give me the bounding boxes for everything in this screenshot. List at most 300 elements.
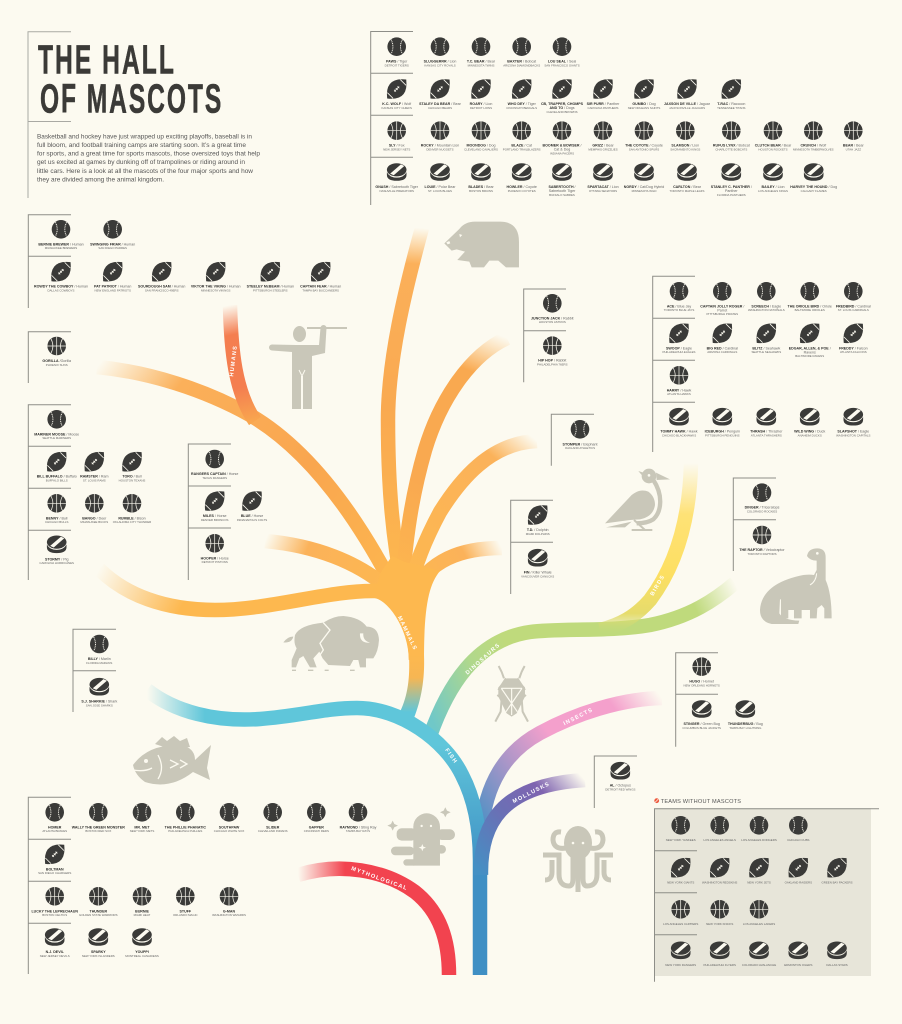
mascot: Roary: DETROIT LIONS: [470, 106, 492, 110]
mascot: Slapshot: SLAPSHOT / Eagle: [837, 430, 869, 434]
mascot: Nordy: MINNESOTA WILD: [632, 189, 656, 193]
mascot: K.C. Wolf: [381, 73, 412, 110]
mascot: Boomer and Bowser: BOOMER & BOWSER /: [543, 144, 581, 148]
mascot: Thunderbug: THUNDERBUG / Bug: [728, 722, 763, 726]
mascot: Jaxson De Ville: [664, 73, 711, 110]
mascot: Screech: SCREECH / Eagle: [751, 304, 781, 308]
team: Los Angeles Clippers: LOS ANGELES CLIPPERS: [663, 922, 698, 926]
mascot: Pat Patriot: PAT PATRIOT / Human: [94, 285, 131, 289]
mascot: Rangers Captain: [191, 450, 238, 480]
mascot: Blitz: BLITZ / Seahawk: [752, 346, 780, 350]
mascot: Sparky: NEW YORK ISLANDERS: [82, 954, 115, 958]
mascot: Wild Wing: WILD WING / Duck: [794, 430, 825, 434]
mascot: Sir Purr: SIR PURR / Panther: [587, 102, 620, 106]
mascot: Nordy: NORDY / Cat/Dog Hybrid: [624, 185, 664, 189]
mascot: S.J. Sharkie: S.J. SHARKIE / Shark: [81, 700, 117, 704]
mascot: Blue: BLUE / Horse: [241, 514, 263, 518]
mascot: Thrash: THRASH / Thrasher: [750, 430, 783, 434]
heading: THE HALL: [38, 37, 176, 83]
mascot: Howler: [507, 163, 537, 193]
mascot: Swoop: SWOOP / Eagle: [666, 346, 692, 350]
mascot: Bailey: LOS ANGELES KINGS: [758, 189, 788, 193]
mascot: Screech: WASHINGTON NATIONALS: [748, 308, 785, 312]
mascot: Ace: [664, 282, 694, 312]
team: Edmonton Oilers: [784, 942, 812, 967]
panel: teams without mascots: [654, 798, 879, 982]
mascot: Gapper: CINCINNATI REDS: [304, 829, 329, 833]
mascot: Rowdy the Cowboy: [34, 256, 88, 292]
mascot: Boomer and Bowser: Cat & Dog: [554, 148, 570, 152]
team: New York Knicks: [706, 900, 733, 926]
label: mythological: MYTHOLOGICAL: [350, 866, 408, 892]
team: New York Jets: [743, 852, 775, 884]
mascot: Stanley C. Panther: Panther: [725, 189, 738, 193]
icon: beetle: [495, 666, 528, 722]
mascot: Who Dey: CINCINNATI BENGALS: [506, 106, 537, 110]
intro text: they are divided among the animal kingdom.: [37, 176, 164, 183]
mascot: Louie: LOUIE / Polar Bear: [425, 185, 456, 189]
mascot: Tommy Hawk: TOMMY HAWK / Hawk: [660, 430, 698, 434]
mascot: Big Red: [707, 318, 738, 354]
team: Dallas Stars: [826, 942, 848, 967]
mascot: Burnie: MIAMI HEAT: [134, 913, 151, 917]
mascot: Toro: HOUSTON TEXANS: [119, 479, 145, 483]
mascot: Youppi: YOUPPI: [135, 950, 149, 954]
mascot: T.C. Bear: [467, 37, 496, 68]
mascot: Slider: [258, 803, 288, 833]
mascot: Edgar, Allen, and Poe: EDGAR, ALLEN, & POE /: [789, 346, 831, 350]
mascot: Staley Da Bear: CHICAGO BEARS: [428, 106, 452, 110]
mascot: Slider: SLIDER: [266, 825, 280, 829]
mascot: Sabertooth: BUFFALO SABRES: [549, 193, 575, 197]
family tree ribbons: [97, 228, 735, 975]
mascot: T.C. Bear: T.C. BEAR / Bear: [467, 60, 496, 64]
mascot: Captain Fear: TAMPA BAY BUCCANEERS: [302, 289, 339, 293]
panel: birds: [653, 276, 871, 452]
mascot: Bango: BANGO / Deer: [82, 516, 107, 520]
panel: humans: [28, 215, 341, 308]
mascot: Carlton: [670, 163, 705, 193]
team: New York Yankees: NEW YORK YANKEES: [666, 838, 696, 842]
team: Colorado Avalanche: [742, 942, 776, 967]
mascot: Tommy Hawk: CHICAGO BLACKHAWKS: [662, 434, 696, 438]
mascot: Hooper: HOOPER / Horse: [201, 556, 229, 560]
mascot: Wild Wing: [794, 408, 825, 438]
mascot: Rufus Lynx: [713, 121, 750, 152]
label: dinosaurs: DINOSAURS: [465, 642, 502, 676]
mascot: Stormy: [39, 536, 74, 565]
mascot: Rowdy the Cowboy: DALLAS COWBOYS: [48, 289, 75, 293]
mascot: Rocky: ROCKY / Mountain Lion: [421, 144, 459, 148]
mascot: Swoop: [663, 318, 696, 354]
mascot: Stinger: STINGER / Green Bug: [684, 722, 720, 726]
team: Dallas Stars: DALLAS STARS: [826, 963, 848, 967]
mascot: Mariner Moose: SEATTLE MARINERS: [42, 436, 71, 440]
mascot: Rumble: [113, 494, 151, 524]
panel: rabbits: [524, 289, 574, 382]
mascot: Grizz: MEMPHIS GRIZZLIES: [588, 147, 618, 151]
mascot: The Phillie Phanatic: PHILADELPHIA PHILLIES: [168, 829, 202, 833]
mascot: Sluggerrr: KANSAS CITY ROYALS: [424, 64, 456, 68]
mascot: Hooper: DETROIT PISTONS: [202, 560, 228, 564]
mascot: CB, Trapper, Chomps and TD: [541, 73, 584, 114]
mascot: Burnie: [133, 887, 151, 917]
mascot: Junction Jack: JUNCTION JACK / Rabbit: [531, 316, 574, 320]
mascot: The Coyote: SAN ANTONIO SPURS: [629, 147, 659, 151]
mascot: Captain Jolly Roger: CAPTAIN JOLLY ROGER /: [700, 304, 744, 308]
intro text: Basketball and hockey have just wrapped up exciting playoffs, baseball is in: [37, 134, 252, 140]
team: New York Knicks: NEW YORK KNICKS: [706, 922, 733, 926]
mascot: Stomper: STOMPER / Elephant: [563, 442, 597, 446]
mascot: Sourdough Sam: SOURDOUGH SAM / Human: [138, 285, 185, 289]
team: Chicago Cubs: CHICAGO CUBS: [787, 838, 810, 842]
mascot: Bill Buffalo: [37, 446, 77, 482]
mascot: CB, Trapper, Chomps and TD: CLEVELAND BROWNS: [546, 110, 578, 114]
team: Los Angeles Clippers: [663, 900, 698, 926]
mascot: Gumbo: NEW ORLEANS SAINTS: [628, 106, 660, 110]
team: Chicago Cubs: [787, 816, 810, 842]
icon: no symbol: [654, 798, 659, 803]
mascot: The Oriole Bird: THE ORIOLE BIRD / Oriole: [788, 304, 832, 308]
mascot: Gnash: [375, 163, 419, 193]
mascot: Thunder: [79, 887, 118, 917]
mascot: Captain Fear: [300, 256, 341, 292]
team: Washington Redskins: [702, 852, 737, 884]
mascot: Sluggerrr: SLUGGERRR / Lion: [424, 60, 456, 64]
mascot: Al: DETROIT RED WINGS: [605, 788, 635, 792]
mascot: Baxter: [503, 37, 540, 68]
mascot: Blitz: SEATTLE SEAHAWKS: [751, 350, 781, 354]
mascot: Big Red: BIG RED / Cardinal: [707, 346, 738, 350]
mascot: Jaxson De Ville: JAXSON DE VILLE / Jaguar: [664, 102, 711, 106]
panel: horses: [188, 444, 268, 580]
mascot: Billy: [86, 635, 112, 665]
icon: dinosaur: [760, 548, 832, 624]
team: Green Bay Packers: GREEN BAY PACKERS: [821, 881, 853, 885]
mascot: Benny: [45, 494, 68, 524]
mascot: Steeley McBeam: STEELEY McBEAM / Human: [247, 285, 294, 289]
mascot: Southpaw: SOUTHPAW: [219, 825, 240, 829]
mascot: T-Rac: T-RAC / Raccoon: [717, 102, 745, 106]
panel: gorilla: [28, 332, 71, 383]
icon: mythological creature: [387, 807, 455, 866]
mascot: Mariner Moose: [34, 410, 79, 440]
mascot: N.J. Devil: [40, 928, 70, 958]
mascot: Stuff: STUFF: [180, 909, 192, 913]
mascot: Harvey the Hound: [790, 163, 837, 193]
mascot: Sabertooth: SABERTOOTH /: [548, 185, 576, 189]
mascot: Burnie: BURNIE: [135, 909, 149, 913]
mascot: Bear: UTAH JAZZ: [846, 147, 861, 151]
mascot: Who Dey: WHO DEY / Tiger: [508, 102, 537, 106]
mascot: Ace: TORONTO BLUE JAYS: [664, 308, 694, 312]
mascot: Rufus Lynx: CHARLOTTE BOBCATS: [715, 147, 747, 151]
mascot: Billy: BILLY / Marlin: [88, 657, 111, 661]
mascot: Stormy: STORMY / Pig: [45, 557, 68, 561]
panel: insects: [676, 653, 763, 747]
mascot: Harvey the Hound: CALGARY FLAMES: [801, 189, 827, 193]
mascot: T.C. Bear: MINNESOTA TWINS: [468, 64, 495, 68]
team: New York Giants: [665, 852, 696, 884]
mascot: Spartacat: SPARTACAT / Lion: [587, 185, 619, 189]
mascot: Jaxson De Ville: JACKSONVILLE JAGUARS: [669, 106, 705, 110]
mascot: Fin: FIN / Killer Whale: [524, 571, 552, 575]
mascot: Bill Buffalo: BUFFALO BILLS: [46, 479, 68, 483]
mascot: Raymond: RAYMOND / Sting Ray: [340, 825, 377, 829]
mascot: Hugo: NEW ORLEANS HORNETS: [684, 684, 720, 688]
mascot: Hugo: HUGO / Hornet: [689, 680, 714, 684]
mascot: G-Man: [212, 887, 246, 917]
mascot: Baxter: ARIZONA DIAMONDBACKS: [503, 64, 540, 68]
mascot: Benny: BENNY / Bull: [46, 516, 68, 520]
team: New York Yankees: [666, 816, 696, 842]
mascot: Steeley McBeam: PITTSBURGH STEELERS: [253, 289, 288, 293]
mascot: Stanley C. Panther: FLORIDA PANTHERS: [717, 193, 746, 197]
mascot: Lou Seal: SAN FRANCISCO GIANTS: [544, 64, 580, 68]
mascot: Gumbo: [628, 73, 660, 110]
team: Philadelphia Flyers: PHILADELPHIA FLYERS: [703, 963, 736, 967]
label: mollusks: MOLLUSKS: [512, 781, 551, 805]
mascot: Sir Purr: CAROLINA PANTHERS: [588, 106, 619, 110]
team: Washington Redskins: WASHINGTON REDSKINS: [702, 881, 737, 885]
heading: [38, 37, 223, 122]
mascot: Mr. Met: NEW YORK METS: [130, 829, 154, 833]
mascot: Boomer and Bowser: [543, 121, 581, 156]
team: Los Angeles Lakers: LOS ANGELES LAKERS: [743, 922, 775, 926]
mascot: Mr. Met: MR. MET: [134, 825, 150, 829]
mascot: Sparky: [82, 928, 115, 958]
mascot: Ramster: [79, 446, 110, 482]
panel: dinosaurs: [733, 478, 785, 571]
mascot: Iceburgh: PITTSBURGH PENGUINS: [705, 434, 740, 438]
mascot: Blue: [236, 485, 268, 522]
mascot: Sluggerrr: [424, 37, 456, 68]
panel: mammals left block: [28, 405, 151, 580]
mascot: Dinger: DINGER / Triceratops: [745, 506, 780, 510]
mascot: Rowdy the Cowboy: ROWDY THE COWBOY / Human: [34, 285, 88, 289]
mascot: T.D.: MIAMI DOLPHINS: [526, 532, 550, 536]
mascot: Blaze: [503, 121, 541, 152]
mascot: T-Rac: TENNESSEE TITANS: [717, 106, 746, 110]
team: New York Giants: NEW YORK GIANTS: [667, 881, 694, 885]
mascot: N.J. Devil: NEW JERSEY DEVILS: [40, 954, 70, 958]
mascot: Raymond: [340, 803, 377, 833]
mascot: Lou Seal: [544, 37, 580, 68]
mascot: Crunch: CRUNCH / Wolf: [800, 144, 826, 148]
mascot: Wally the Green Monster: WALLY THE GREEN MONSTER: [72, 825, 125, 829]
mascot: Boomer and Bowser: INDIANA PACERS: [550, 151, 574, 155]
mascot: Clutch Bear: [755, 121, 792, 152]
mascot: Grizz: GRIZZ / Bear: [592, 144, 614, 148]
icon: human with spear: [269, 325, 347, 409]
mascot: Bailey: BAILEY / Lion: [762, 185, 784, 189]
mascot: Captain Fear: CAPTAIN FEAR / Human: [300, 285, 341, 289]
mascot: The Phillie Phanatic: [165, 803, 206, 833]
mascot: Wally the Green Monster: [72, 803, 125, 833]
mascot: Lucky the Leprechaun: LUCKY THE LEPRECHAUN: [31, 909, 78, 913]
mascot: Carlton: CARLTON / Bear: [673, 185, 702, 189]
team: New York Jets: NEW YORK JETS: [747, 881, 771, 885]
mascot: Rangers Captain: RANGERS CAPTAIN / Horse: [191, 472, 238, 476]
mascot: The Oriole Bird: [788, 282, 832, 312]
mascot: Raymond: TAMPA BAY RAYS: [346, 829, 370, 833]
mascot: CB, Trapper, Chomps and TD: CB, TRAPPER, CHOMPS: [541, 102, 584, 106]
team: New York Rangers: [665, 942, 696, 967]
team: Los Angeles Angels: LOS ANGELES ANGELS: [703, 838, 736, 842]
mascot: Gumbo: GUMBO / Dog: [632, 102, 656, 106]
mascot: Benny: CHICAGO BULLS: [45, 520, 68, 524]
mascot: Stuff: ORLANDO MAGIC: [173, 913, 198, 917]
team: Los Angeles Dodgers: LOS ANGELES DODGERS: [741, 838, 777, 842]
mascot: Thunder: GOLDEN STATE WARRIORS: [79, 913, 118, 917]
mascot: Rocky: [421, 121, 459, 152]
mascot: Harry: HARRY / Hawk: [667, 388, 692, 392]
mascot: Clutch Bear: CLUTCH BEAR / Bear: [755, 144, 792, 148]
intro text: [37, 134, 260, 183]
mascot: Southpaw: [214, 803, 244, 833]
mascot: Ramster: ST. LOUIS RAMS: [83, 479, 106, 483]
panel: mammals top block: [371, 32, 864, 205]
mascot: Blaze: PORTLAND TRAILBLAZERS: [503, 147, 541, 151]
mascot: Southpaw: CHICAGO WHITE SOX: [214, 829, 244, 833]
mascot: Gnash: NASHVILLE PREDATORS: [379, 189, 414, 193]
mascot: Rumble: RUMBLE / Bison: [118, 516, 146, 520]
mascot: Gnash: GNASH / Sabretooth Tiger: [375, 185, 419, 189]
mascot: K.C. Wolf: KANSAS CITY CHIEFS: [381, 106, 412, 110]
mascot: Miles: [199, 485, 230, 522]
mascot: Slapshot: [836, 408, 871, 438]
mascot: Slamson: SACRAMENTO KINGS: [670, 147, 700, 151]
icon: bison: [283, 616, 379, 670]
mascot: Blue: INDIANAPOLIS COLTS: [237, 518, 267, 522]
mascot: Spartacat: [587, 163, 619, 193]
mascot: G-Man: G-MAN: [223, 909, 235, 913]
mascot: Clutch Bear: HOUSTON ROCKETS: [758, 147, 788, 151]
mascot: Paws: [385, 37, 409, 68]
mascot: Staley Da Bear: STALEY DA BEAR / Bear: [419, 102, 462, 106]
panel: fish: [73, 629, 117, 712]
mascot: Mariner Moose: MARINER MOOSE / Moose: [34, 432, 79, 436]
mascot: Miles: MILES / Horse: [203, 514, 226, 518]
mascot: Stinger: [682, 700, 721, 730]
mascot: Moondog: CLEVELAND CAVALIERS: [464, 147, 498, 151]
mascot: Swoop: PHILADELPHIA EAGLES: [663, 350, 696, 354]
mascot: Lucky the Leprechaun: [31, 887, 78, 917]
mascot: Thrash: ATLANTA THRASHERS: [751, 434, 782, 438]
mascot: Slider: CLEVELAND INDIANS: [258, 829, 288, 833]
team: Los Angeles Angels: [703, 816, 736, 842]
mascot: Sourdough Sam: [138, 256, 185, 292]
mascot: Roary: [465, 73, 497, 110]
mascot: Hip Hop: [537, 336, 568, 366]
mascot: Ace: ACE / Blue Jay: [667, 304, 691, 308]
mascot: Harvey the Hound: HARVEY THE HOUND / Dog: [790, 185, 837, 189]
mascot: Freddy: FREDDY / Falcon: [839, 346, 868, 350]
mascot: The Oriole Bird: BALTIMORE ORIOLES: [795, 308, 825, 312]
mascot: Blitz: [751, 318, 782, 354]
mascot: Swinging Friar: SWINGING FRIAR / Human: [90, 242, 135, 246]
mascot: Hugo: [684, 657, 720, 688]
mascot: Viktor the Viking: [191, 256, 241, 292]
mascot: Fredbird: [836, 282, 871, 312]
mascot: Viktor the Viking: MINNESOTA VIKINGS: [201, 289, 230, 293]
mascot: G-Man: WASHINGTON WIZARDS: [212, 913, 246, 917]
intro text: full bloom, and football training camps are starting soon. It’s a great time: [37, 142, 246, 149]
mascot: Roary: ROARY / Lion: [470, 102, 492, 106]
label: mammals: MAMMALS: [396, 615, 418, 652]
mascot: Hooper: [201, 534, 229, 564]
mascot: Stormy: CAROLINA HURRICANES: [39, 561, 74, 565]
mascot: Edgar, Allen, and Poe: Ravens: [804, 350, 816, 354]
mascot: Mr. Met: [130, 803, 154, 833]
mascot: Captain Jolly Roger: [700, 282, 744, 316]
mascot: Boltman: BOLTMAN: [46, 867, 64, 871]
mascot: Captain Jolly Roger: PITTSBURGH PIRATES: [707, 312, 738, 316]
mascot: The Raptor: TORONTO RAPTORS: [747, 552, 777, 556]
mascot: Sly: SLY / Fox: [389, 144, 405, 148]
team: Edmonton Oilers: EDMONTON OILERS: [784, 963, 812, 967]
mascot: Gorilla: [42, 337, 71, 367]
mascot: Rumble: OKLAHOMA CITY THUNDER: [113, 520, 151, 524]
mascot: Blades: BLADES / Bear: [468, 185, 494, 189]
mascot: Who Dey: [506, 73, 537, 110]
mascot: Boltman: SAN DIEGO CHARGERS: [38, 871, 71, 875]
mascot: Bailey: [758, 163, 788, 193]
mascot: Sourdough Sam: SAN FRANCISCO 49ERS: [145, 289, 179, 293]
team: Oakland Raiders: OAKLAND RAIDERS: [785, 881, 812, 885]
mascot: Junction Jack: HOUSTON ASTROS: [539, 320, 566, 324]
mascot: Spartacat: OTTAWA SENATORS: [589, 189, 617, 193]
mascot: Bango: [80, 494, 108, 524]
team: Philadelphia Flyers: [703, 942, 736, 967]
mascot: Homer: [42, 803, 67, 833]
mascot: Gapper: [304, 803, 329, 833]
mascot: Blaze: BLAZE / Cat: [511, 144, 532, 148]
mascot: Bango: MILWAUKEE BUCKS: [80, 520, 108, 524]
mascot: Tommy Hawk: [660, 408, 698, 438]
mascot: Dinger: [745, 483, 780, 514]
mascot: Slamson: [670, 121, 700, 152]
mascot: The Phillie Phanatic: THE PHILLIE PHANATIC: [165, 825, 206, 829]
mascot: Homer: HOMER: [48, 825, 62, 829]
mascot: Fredbird: ST. LOUIS CARDINALS: [838, 308, 869, 312]
mascot: Stomper: [563, 420, 597, 450]
mascot: The Coyote: [625, 121, 663, 152]
mascot: Hip Hop: PHILADELPHIA 76ERS: [537, 363, 568, 367]
mascot: Harry: ATLANTA HAWKS: [667, 392, 691, 396]
mascot: Al: AL / Octopus: [610, 784, 631, 788]
mascot: Harry: [667, 366, 692, 396]
mascot: Thunderbug: TAMPA BAY LIGHTNING: [729, 726, 762, 730]
mascot: Toro: TORO / Bull: [122, 475, 142, 479]
mascot: Baxter: BAXTER / Bobcat: [507, 60, 536, 64]
mascot: Stinger: COLUMBUS BLUE JACKETS: [682, 726, 721, 730]
mascot: Thunderbug: [728, 700, 763, 730]
label: humans: HUMANS: [229, 345, 239, 377]
team: Los Angeles Lakers: [743, 900, 775, 926]
mascot: Dinger: COLORADO ROCKIES: [747, 510, 777, 514]
mascot: Fredbird: FREDBIRD / Cardinal: [836, 304, 871, 308]
label: fish: FISH: [443, 748, 458, 765]
mascot: Lou Seal: LOU SEAL / Seal: [548, 60, 576, 64]
mascot: Lucky the Leprechaun: BOSTON CELTICS: [42, 913, 67, 917]
heading: OF MASCOTS: [40, 76, 223, 122]
icon: octopus: [543, 826, 613, 892]
mascot: Paws: PAWS / Tiger: [386, 60, 408, 64]
mascot: Sabertooth: [548, 163, 576, 197]
mascot: Howler: HOWLER / Coyote: [507, 185, 537, 189]
mascot: Fin: [521, 549, 554, 578]
